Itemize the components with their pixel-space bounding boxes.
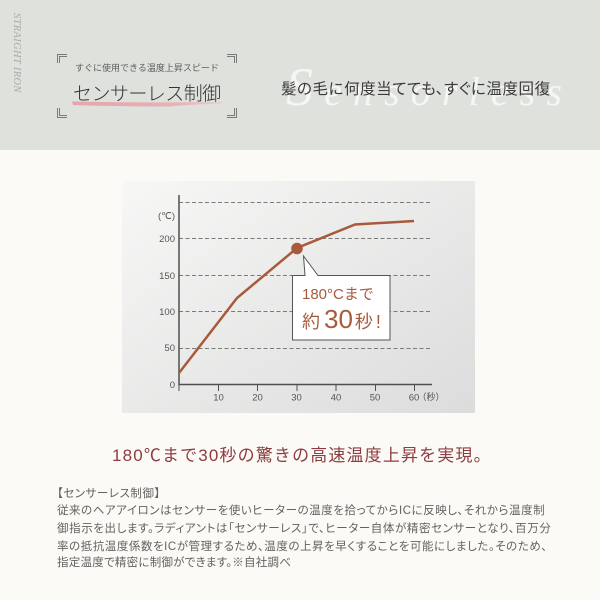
- y-axis labels: (℃): [158, 211, 175, 222]
- body text: 従来のヘアアイロンはセンサーを使いヒーターの温度を拾ってからICに反映し、それから温度制: [57, 505, 545, 517]
- x-axis labels: 50: [370, 392, 380, 404]
- axes: [179, 195, 432, 391]
- callout: [292, 256, 390, 340]
- callout: 約30秒!: [302, 304, 381, 334]
- subtitle: すぐに使用できる温度上昇スピード: [75, 63, 219, 73]
- chart panel: [122, 181, 475, 413]
- x-axis labels: 20: [252, 392, 263, 404]
- data point: [291, 243, 303, 254]
- header band: [0, 0, 600, 150]
- highlighter stroke: [72, 102, 222, 106]
- x-axis labels: （秒）: [417, 391, 445, 402]
- y-axis labels: 0: [170, 380, 175, 391]
- main heading: センサーレス制御: [73, 84, 221, 105]
- temperature curve: [179, 221, 414, 373]
- x-axis labels: 60: [409, 392, 419, 404]
- body text: 指定温度で精密に制御ができます。※自社調べ: [57, 557, 291, 569]
- callout: 180°Cまで: [302, 286, 374, 303]
- y-axis labels: 150: [159, 271, 175, 282]
- headline: 180℃まで30秒の驚きの高速温度上昇を実現。: [112, 446, 492, 465]
- body text: 率の抵抗温度係数をICが管理するため、温度の上昇を早くすることを可能にしました。そのため、: [57, 541, 548, 553]
- body text: [57, 487, 551, 569]
- body text: 【センサーレス制御】: [57, 488, 161, 500]
- y-axis labels: 200: [159, 234, 175, 245]
- x-axis labels: 30: [291, 392, 302, 404]
- x-axis labels: [213, 391, 445, 404]
- x-axis labels: 10: [213, 392, 224, 404]
- title block with corner brackets: [57, 54, 237, 118]
- body text: 御指示を出します。ラディアントは「センサーレス」で、ヒーター自体が精密センサーとなり、百万分: [57, 523, 551, 535]
- x-axis labels: 40: [331, 392, 341, 404]
- y-axis labels: 100: [159, 307, 175, 318]
- header tagline: 髪の毛に何度当てても、すぐに温度回復: [281, 81, 551, 98]
- corner brackets: [57, 54, 237, 118]
- y-axis labels: [158, 211, 175, 391]
- y-axis labels: 50: [164, 343, 175, 354]
- vertical label: STRAIGHT IRON: STRAIGHT IRON: [11, 13, 22, 93]
